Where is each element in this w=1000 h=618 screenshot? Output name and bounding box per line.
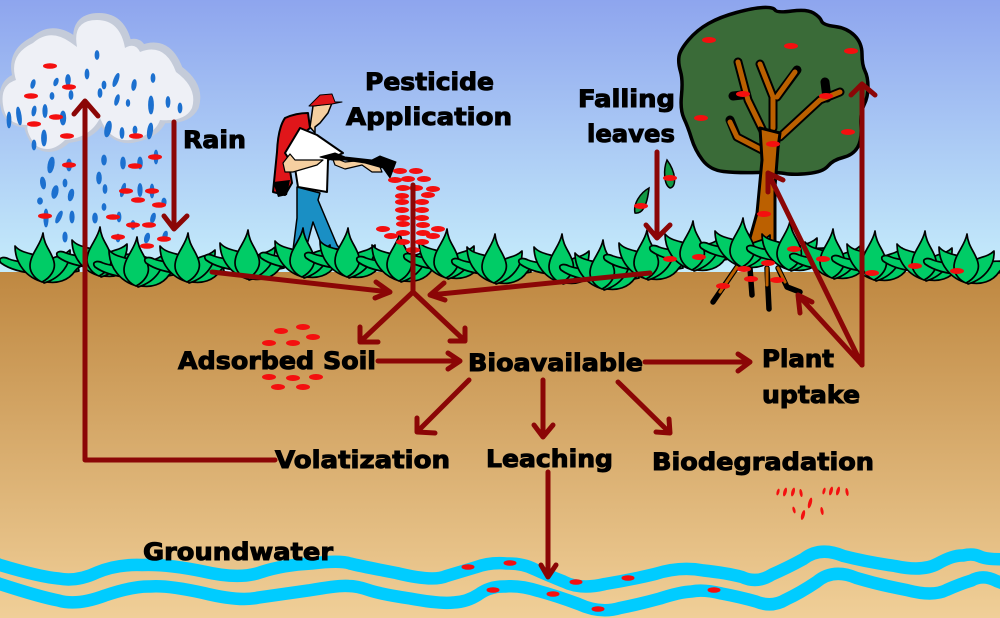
arrow: uptake to canopy xyxy=(851,84,875,365)
arrow: bioavailable to plant uptake xyxy=(645,354,750,371)
backpack xyxy=(273,113,310,195)
arrow: uptake to roots xyxy=(798,295,862,365)
arrow: to bioavailable xyxy=(413,292,465,341)
label: Leaching: Leaching xyxy=(486,445,613,473)
arrow: application stem xyxy=(410,185,416,292)
person applying pesticide xyxy=(273,94,396,250)
arrow: bioavailable to leaching xyxy=(534,380,553,437)
far arm xyxy=(332,157,382,172)
arrow: falling leaves xyxy=(646,152,670,238)
groundwater streams xyxy=(0,552,1000,610)
head xyxy=(310,103,332,133)
label: Falling leaves: leaves xyxy=(587,120,675,148)
red particles: biodegraded fragments xyxy=(776,486,849,520)
label: Falling leaves xyxy=(578,85,675,148)
tree trunk xyxy=(748,128,780,245)
red pesticide particles: spray xyxy=(376,168,445,253)
label: Plant uptake: uptake xyxy=(762,381,860,409)
sprayer xyxy=(320,153,396,178)
arrow: leaves to soil xyxy=(430,273,650,300)
label: Falling leaves: Falling xyxy=(578,85,675,113)
falling leaves xyxy=(635,160,675,213)
raindrops xyxy=(7,50,182,243)
shirt xyxy=(285,128,343,192)
label: Plant uptake xyxy=(762,345,860,409)
red pesticide particles: tree and plants xyxy=(634,37,964,289)
arrow: bioavailable to volatization xyxy=(417,380,469,433)
label: Adsorbed Soil: Adsorbed Soil xyxy=(178,347,376,375)
arrow: leaching to groundwater xyxy=(541,472,556,577)
arrow: to adsorbed soil xyxy=(360,292,413,342)
label: Pesticide Application: Application xyxy=(346,103,512,131)
arrow: adsorbed soil to bioavailable xyxy=(378,353,460,369)
jeans xyxy=(293,187,340,250)
label: Biodegradation: Biodegradation xyxy=(652,448,874,476)
label: Bioavailable: Bioavailable xyxy=(468,349,643,377)
label: Groundwater: Groundwater xyxy=(143,538,333,566)
tree xyxy=(679,7,868,309)
background: soil xyxy=(0,272,1000,618)
background: sky xyxy=(0,0,1000,275)
arrow: volatization up to cloud xyxy=(74,101,275,460)
arrow: uptake to trunk xyxy=(768,173,862,365)
tree canopy xyxy=(679,7,868,174)
tree roots xyxy=(713,267,800,309)
label: Volatization: Volatization xyxy=(275,446,450,474)
label: Plant uptake: Plant xyxy=(762,345,834,373)
cloud xyxy=(3,18,195,149)
arrow: rain runoff to soil xyxy=(212,272,390,298)
plants row xyxy=(0,218,1000,290)
red pesticide particles: adsorbed soil xyxy=(262,324,323,390)
label: Pesticide Application xyxy=(346,68,512,131)
cap xyxy=(309,94,342,106)
arrow: bioavailable to biodegradation xyxy=(618,382,670,433)
red pesticide particles: rain xyxy=(24,63,171,249)
arrow: rain xyxy=(164,122,187,229)
label: Rain: Rain xyxy=(183,126,246,154)
tree branches xyxy=(730,62,840,150)
label: Pesticide Application: Pesticide xyxy=(365,68,494,96)
near arm xyxy=(283,154,323,172)
red pesticide particles: groundwater xyxy=(462,560,720,612)
